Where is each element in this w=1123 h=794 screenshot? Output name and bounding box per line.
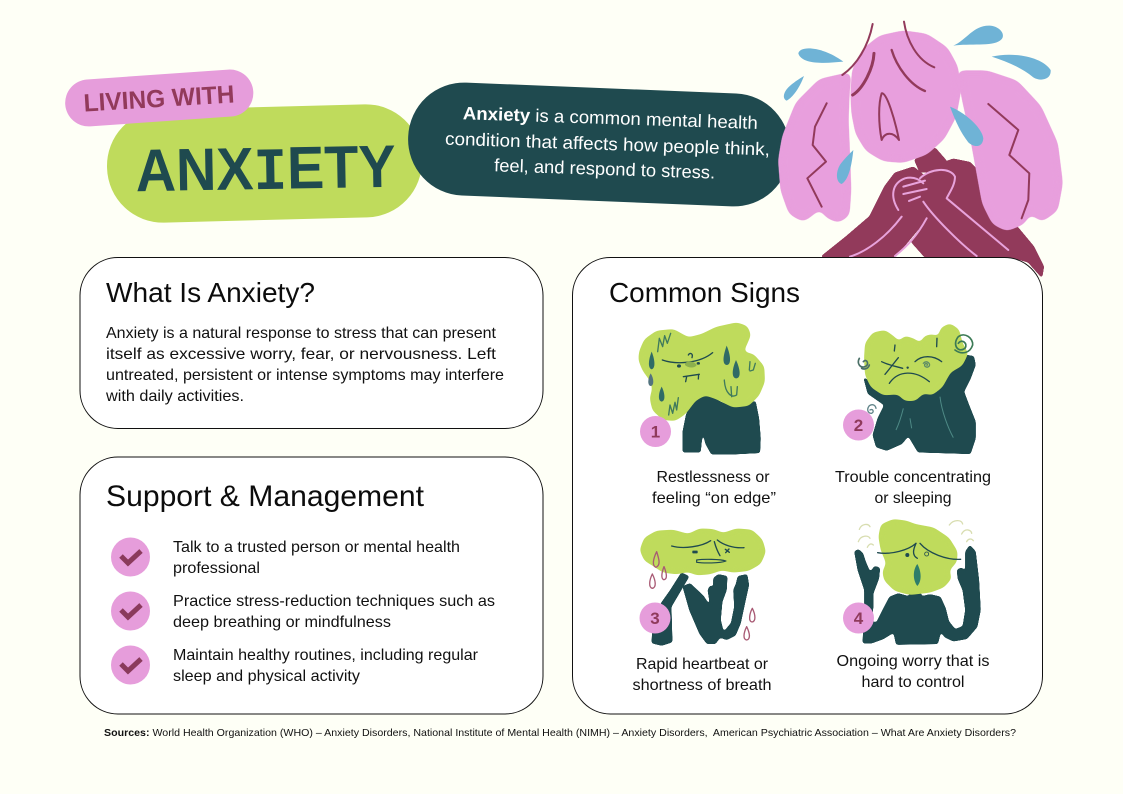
- badge: number 1: 1: [651, 422, 660, 442]
- label: sign 4: Ongoing worry that is: [836, 653, 990, 670]
- panel: what is anxiety: [80, 258, 543, 428]
- heading: support and management: Support & Management: [106, 480, 425, 513]
- illustration: sign 1 restlessness: [639, 323, 764, 454]
- label: sign 3: shortness of breath: [632, 677, 772, 694]
- panel: common signs: [572, 258, 1042, 714]
- label: sign 3: Rapid heartbeat or: [636, 656, 769, 673]
- icon: check 1: [111, 538, 150, 576]
- list item 3: [173, 647, 479, 685]
- definition banner: [406, 80, 792, 209]
- badge: number 4: [843, 602, 874, 634]
- illustration: sign 3 rapid heartbeat: [641, 529, 765, 645]
- definition banner: Anxiety is a common mental health: [463, 103, 758, 133]
- list item 2: Practice stress-reduction techniques such as: [173, 593, 495, 610]
- list item 1: [173, 539, 460, 577]
- badge: number 3: [640, 602, 670, 634]
- definition banner: feel, and respond to stress.: [494, 155, 715, 183]
- title badge: living with: [64, 68, 255, 128]
- badge: number 2: 2: [854, 416, 863, 435]
- label: sign 1: [652, 469, 776, 507]
- text block: anxiety description: with daily activities.: [105, 388, 244, 405]
- label: sign 1: Restlessness or: [656, 469, 770, 486]
- badge: number 1: [640, 416, 671, 447]
- label: sign 2: or sleeping: [874, 490, 952, 507]
- label: sign 2: [835, 469, 991, 507]
- list item 1: professional: [173, 560, 260, 577]
- list item 2: deep breathing or mindfulness: [173, 614, 391, 631]
- text block: anxiety description: untreated, persistent or intense symptoms may interfere: [106, 367, 504, 384]
- label: sign 3: [632, 656, 772, 694]
- sources footnote: Sources: World Health Organization (WHO) – Anxiety Disorders, National Institute of Mental Health (NIMH) – Anxiety Disorders, American Psychiatric Association – What Are Anxiety Disorders?: [104, 727, 1016, 739]
- text block: anxiety description: [105, 325, 504, 405]
- icon: check 2: [111, 592, 150, 630]
- label: sign 2: Trouble concentrating: [835, 469, 991, 486]
- list item 2: [173, 593, 495, 631]
- title pill: anxiety: ANXIETY: [135, 133, 396, 210]
- heading: what is anxiety: What Is Anxiety?: [106, 277, 315, 308]
- badge: number 4: 4: [854, 609, 864, 628]
- label: sign 4: hard to control: [862, 674, 964, 691]
- badge: number 2: [843, 410, 874, 440]
- label: sign 1: feeling “on edge”: [652, 490, 776, 507]
- badge: number 3: 3: [650, 609, 660, 628]
- title badge: living with: LIVING WITH: [83, 80, 235, 118]
- list item 3: Maintain healthy routines, including regular: [173, 647, 479, 664]
- icon: check 3: [111, 646, 150, 684]
- definition banner: condition that affects how people think,: [445, 129, 770, 159]
- illustration: anxious pink character with tears: [779, 22, 1062, 277]
- illustration: sign 4 ongoing worry: [855, 520, 980, 644]
- list item 3: sleep and physical activity: [173, 668, 360, 685]
- list item 1: Talk to a trusted person or mental health: [173, 539, 460, 556]
- panel: support and management: [80, 457, 543, 714]
- text block: anxiety description: Anxiety is a natural response to stress that can present: [106, 325, 497, 342]
- text block: anxiety description: itself as excessive worry, fear, or nervousness. Left: [106, 346, 497, 363]
- heading: common signs: Common Signs: [609, 277, 800, 308]
- label: sign 4: [836, 653, 990, 691]
- illustration: sign 2 trouble concentrating: [858, 324, 975, 453]
- title pill: anxiety: [106, 103, 423, 224]
